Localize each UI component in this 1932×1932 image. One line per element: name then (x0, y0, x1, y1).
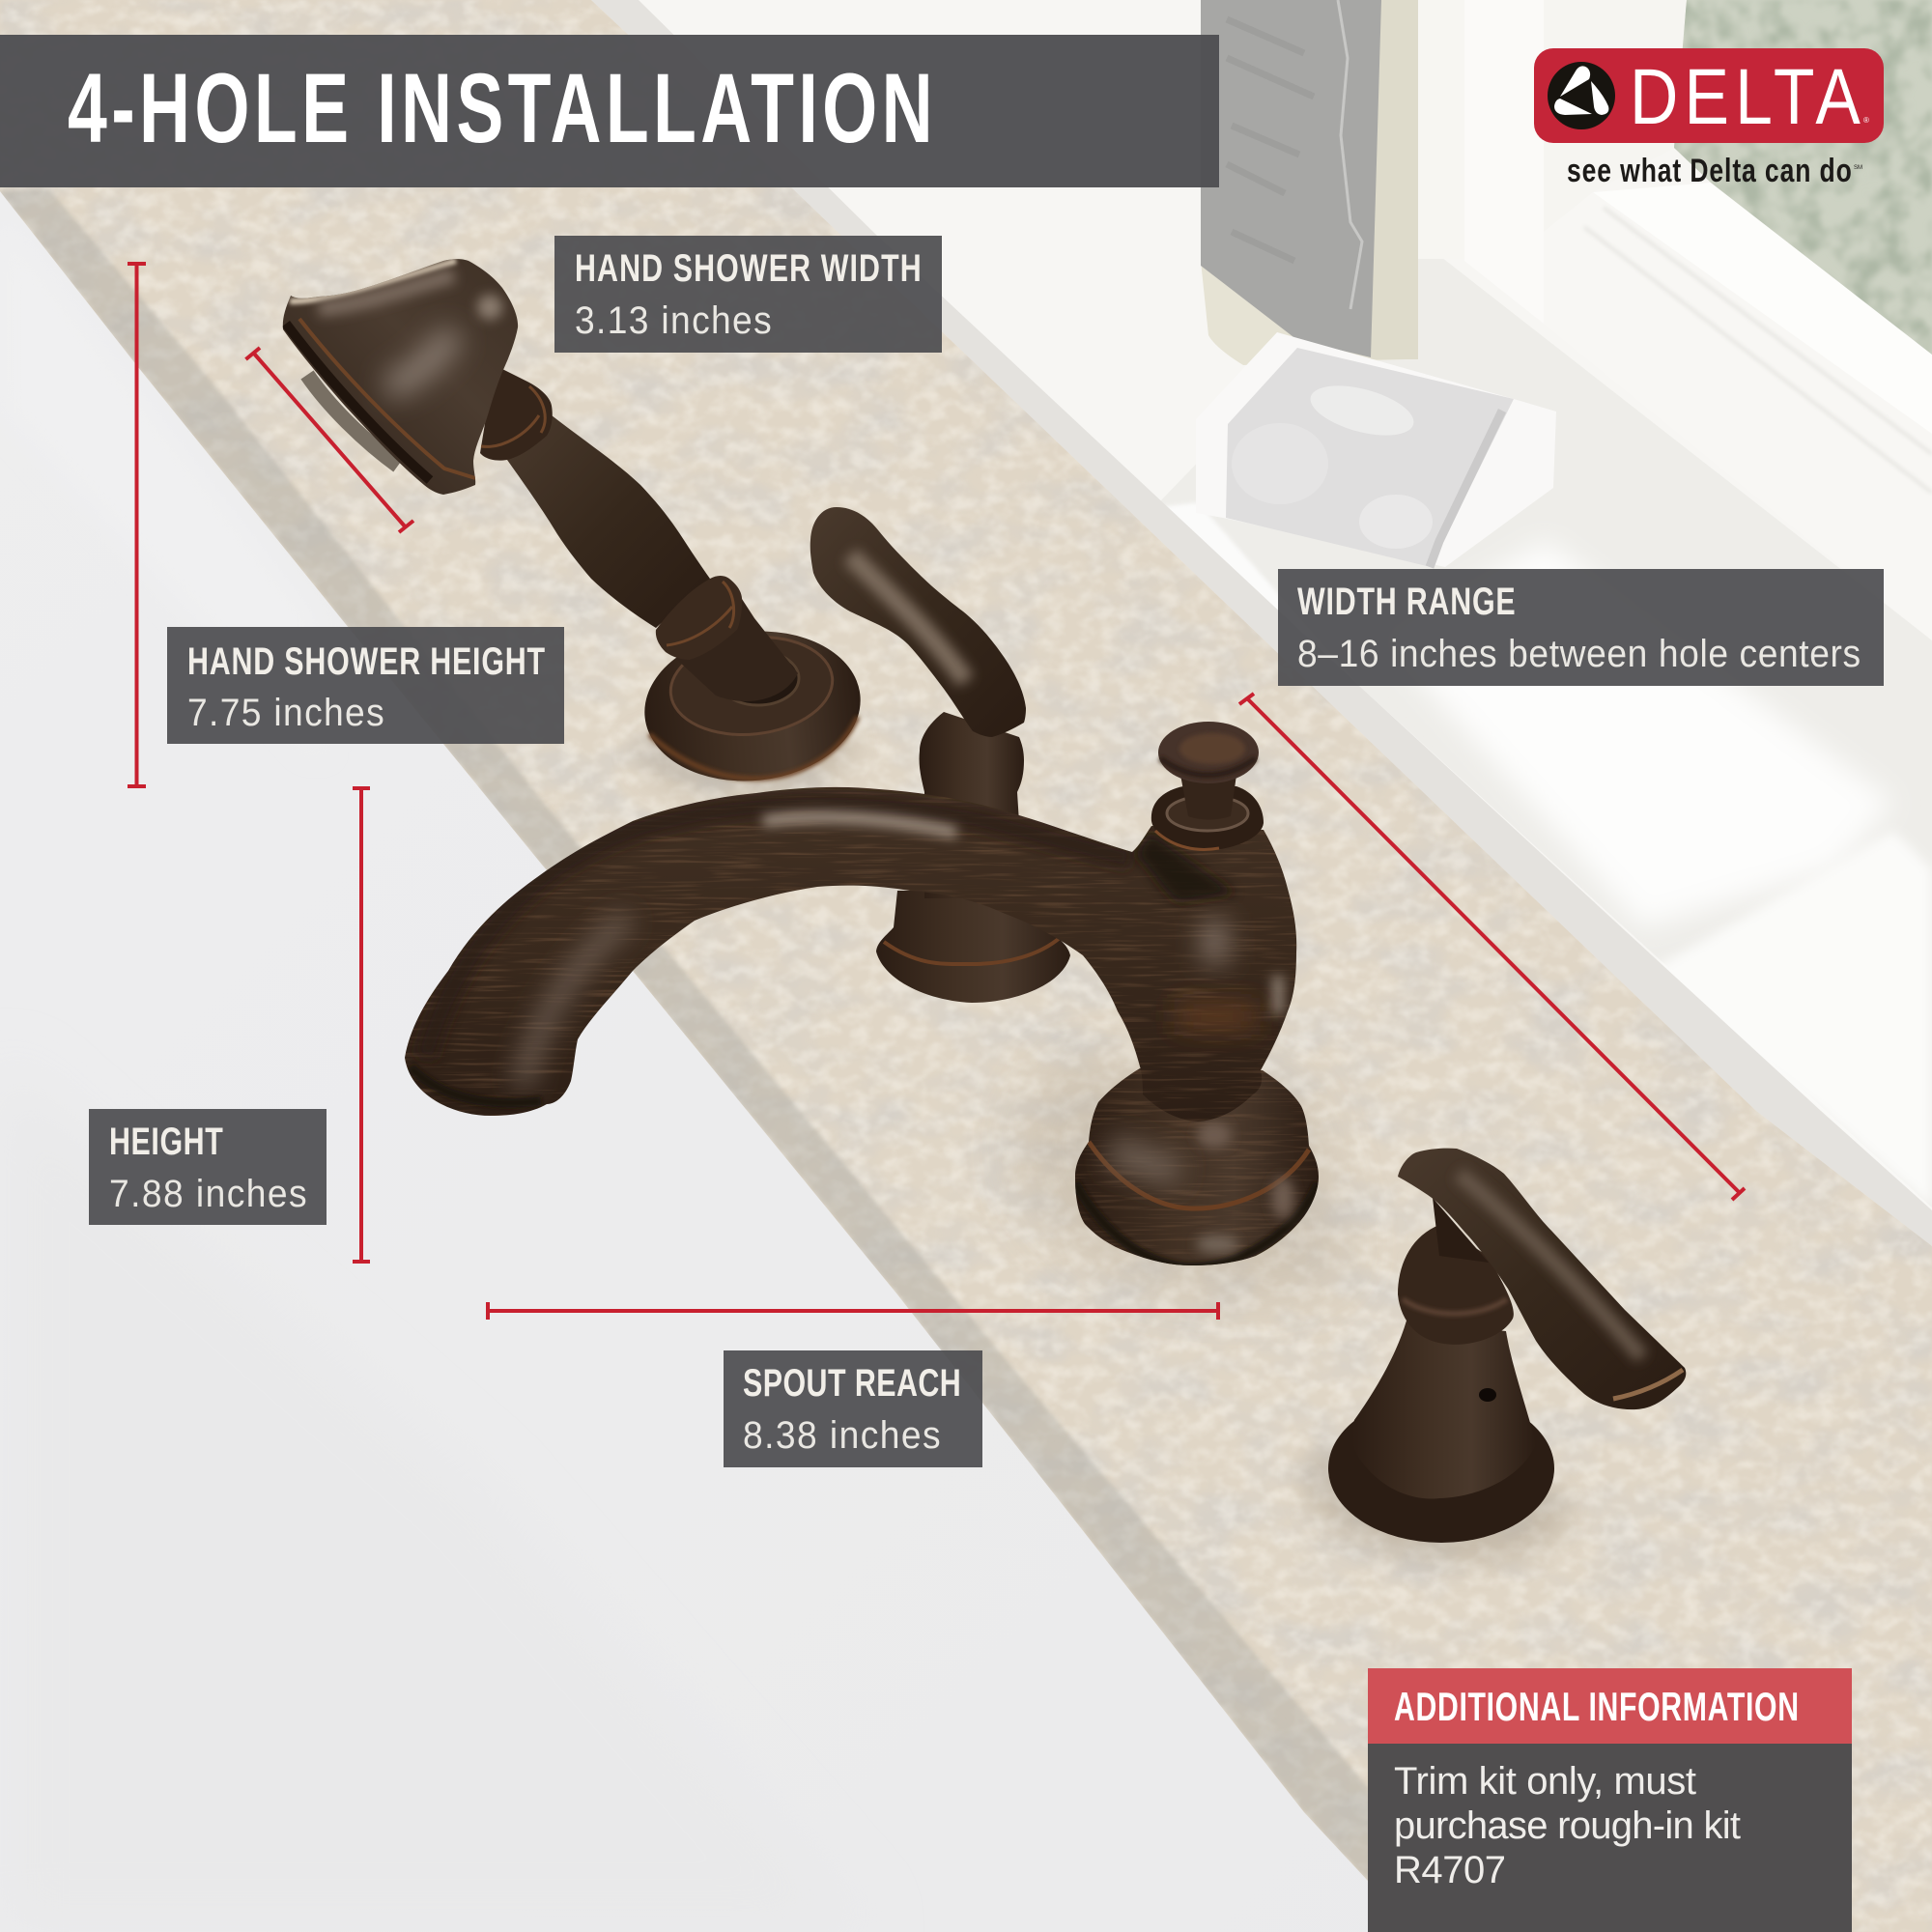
dimension line: hand shower width (245, 348, 413, 532)
spout knob and collar (1151, 722, 1264, 850)
body text (1394, 1760, 1741, 1891)
dimension line: width range (1239, 694, 1745, 1200)
background: soap bar (1196, 332, 1556, 567)
front lever base (1328, 1394, 1554, 1543)
body text: R4707 (1394, 1849, 1506, 1891)
hand shower handle (507, 415, 710, 628)
heading: HAND SHOWER HEIGHT (187, 639, 545, 683)
spout body and arc (405, 787, 1296, 1122)
icon: front lever handle (1328, 1149, 1686, 1543)
front lever arm (1398, 1149, 1686, 1409)
logo: Delta (1534, 48, 1884, 189)
background: window frame and foliage (1418, 0, 1932, 492)
hand shower base (638, 621, 867, 791)
panel: spout reach (724, 1350, 982, 1467)
dimension line: height (353, 788, 370, 1262)
panel: hand shower height (167, 627, 564, 744)
panel: hand shower width (554, 236, 942, 353)
background: window sill (591, 0, 1932, 1246)
value: 8–16 inches between hole centers (1297, 633, 1861, 675)
body text: purchase rough-in kit (1394, 1804, 1741, 1847)
background: bottle (1201, 0, 1418, 365)
title: 4-HOLE INSTALLATION (68, 53, 933, 163)
hand shower collars (480, 369, 742, 660)
dimension line: spout reach (488, 1302, 1218, 1320)
logo: Delta: ® (1863, 116, 1869, 125)
shower head (283, 259, 518, 495)
dimension line: hand shower height (128, 264, 146, 786)
tagline: see what Delta can do (1567, 153, 1852, 189)
spout base (1075, 1068, 1319, 1265)
icon: back lever handle (810, 507, 1070, 1003)
back lever (810, 507, 1026, 737)
icon: Delta triangle mark (1548, 62, 1615, 129)
front lever cone (1351, 1321, 1536, 1499)
heading: HEIGHT (109, 1120, 223, 1163)
front lever collar (1398, 1198, 1514, 1345)
body text: Trim kit only, must (1394, 1760, 1696, 1803)
value: 7.88 inches (109, 1173, 307, 1215)
set screw hole (1479, 1388, 1496, 1402)
panel: additional information (1368, 1668, 1852, 1932)
back valve body (920, 712, 1024, 898)
value: 8.38 inches (743, 1414, 941, 1457)
wordmark: DELTA (1630, 53, 1861, 141)
hand shower stem (677, 580, 798, 701)
heading: HAND SHOWER WIDTH (575, 246, 922, 290)
back valve base (876, 891, 1070, 1003)
heading: ADDITIONAL INFORMATION (1394, 1684, 1799, 1729)
panel: width range (1278, 569, 1884, 686)
panel: height (89, 1109, 327, 1225)
value: 3.13 inches (575, 299, 772, 342)
lever highlight (850, 555, 966, 681)
heading: SPOUT REACH (743, 1361, 961, 1405)
heading: WIDTH RANGE (1297, 580, 1516, 623)
title banner (0, 35, 1219, 187)
logo: Delta: SM (1854, 165, 1862, 171)
icon: main spout (386, 722, 1333, 1275)
value: 7.75 inches (187, 692, 384, 734)
icon: hand shower (283, 259, 867, 791)
